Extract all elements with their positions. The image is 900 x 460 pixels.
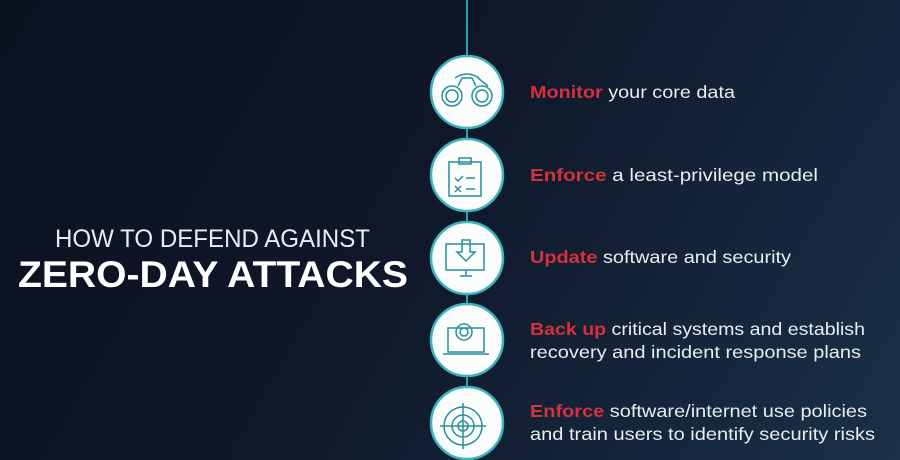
step 1: Monitor your core data xyxy=(530,82,735,102)
icon: laptop backup xyxy=(431,304,503,376)
step 5: Enforce software/internet use policies xyxy=(530,401,867,421)
step 4: Back up critical systems and establish xyxy=(530,319,865,339)
step texts xyxy=(530,82,875,444)
step 5 xyxy=(530,401,875,444)
timeline line xyxy=(466,0,468,460)
icon: radar target xyxy=(431,387,503,459)
icon: clipboard xyxy=(431,139,503,211)
icon: binoculars xyxy=(431,56,503,128)
step 3: Update software and security xyxy=(530,247,791,267)
step 2: Enforce a least-privilege model xyxy=(530,165,818,185)
icon: monitor download xyxy=(431,222,503,294)
step 5: and train users to identify security risks xyxy=(530,424,875,444)
title: ZERO-DAY ATTACKS xyxy=(18,254,408,295)
step 4: recovery and incident response plans xyxy=(530,342,861,362)
title xyxy=(18,225,408,295)
step 4 xyxy=(530,319,865,362)
title: HOW TO DEFEND AGAINST xyxy=(55,225,370,253)
